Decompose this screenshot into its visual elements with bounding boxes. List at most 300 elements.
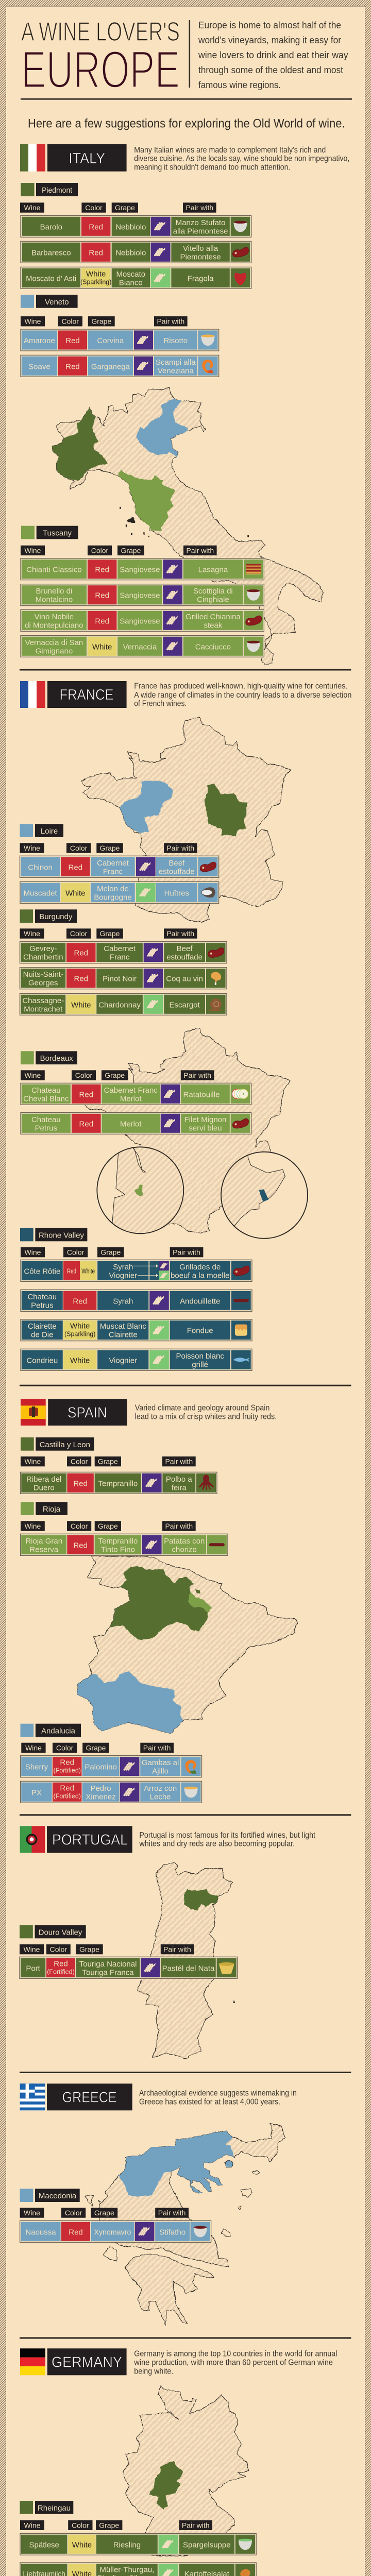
column headers: Macedonia: Grape [94,2209,114,2217]
row: Clairette de Die: White [70,1322,90,1331]
row: Brunello di Montalcino: Montalcino [36,596,73,604]
row: Barbaresco: Red [89,248,103,257]
row: Vino Nobile di Montepulciano: Grilled Chianina [185,613,241,621]
column headers: Rioja [21,1521,196,1531]
column headers: Andalucia [21,1743,174,1753]
legend: Piedmont [21,183,78,196]
row: Nuits-Saint-Georges: Nuits-Saint- [23,970,63,979]
row: Vernaccia di San Gimignano: Gimignano [36,647,73,655]
row: Moscato d' Asti: Bianco [119,278,143,287]
row: Chateau Petrus: Red [79,1120,93,1128]
column headers: Loire: Pair with [166,844,194,852]
column headers: Veneto: Pair with [157,317,184,326]
row: Barbaresco [21,241,251,263]
row: Chateau Petrus [21,1112,251,1134]
row: Port [20,1957,237,1978]
legend: Piedmont: Piedmont [42,186,73,195]
column headers: Burgundy: Wine [24,929,40,938]
row: Chassagne-Montrachet: Montrachet [24,1005,63,1013]
heading: Germany: GERMANY [52,2354,122,2370]
panel: Greece [20,2083,297,2325]
row: Nuits-Saint-Georges: Georges [28,979,58,988]
icon: shrimp [202,360,213,373]
row: Cote Rotie: Syrah [113,1263,133,1272]
row: Chateau Cheval Blanc: Ratatouille [183,1090,220,1099]
row: Vernaccia di San Gimignano: Cacciucco [195,642,231,651]
row: Ribera del Duero [21,1472,217,1494]
row: Soave: Red [65,362,80,371]
row: Amarone: Corvina [97,336,124,345]
row: Chateau Petrus: Filet Mignon [184,1115,226,1124]
icon: steak [232,1118,249,1128]
row: Spatlese: White [72,2540,92,2549]
row: Spatlese: Riesling [113,2540,141,2549]
column headers: Bordeaux: Grape [105,1071,125,1079]
row: Amarone: Red [65,336,80,345]
row: Vernaccia di San Gimignano: Vernaccia di San [25,638,83,647]
column headers: Burgundy: Pair with [166,929,194,938]
column headers: Douro Valley: Pair with [163,1945,191,1954]
heading: Portugal: PORTUGAL [52,1832,128,1849]
row: Chinon: Chinon [28,863,53,872]
icon: bowl [247,589,260,601]
row: Vino Nobile di Montepulciano: di Montepulciano [25,621,83,630]
column headers: Rheingau [20,2520,212,2530]
row: Liebfraumilch: Müller-Thurgau, [99,2566,154,2574]
row: PX [21,1781,202,1803]
column headers: Rheingau: Wine [24,2521,41,2529]
row: Soave: Soave [28,362,50,371]
row: Chinon [20,856,219,877]
row: Sherry: Ajillo [152,1767,168,1776]
intro text: wine lovers to drink and eat their way [198,49,348,60]
row: Cote Rotie: Red [67,1267,76,1275]
row: Muscadet [20,882,219,903]
column headers: Rhone Valley: Pair with [173,1248,200,1257]
row: Gevrey-Chambertin: Franc [110,953,130,962]
map: France, Loire and Burgundy [81,717,291,922]
panel: Italy [20,144,349,665]
row: Naoussa: Xynomavro [94,2228,131,2236]
row: Clairette de Die [21,1319,252,1341]
row: Vino Nobile di Montepulciano: steak [204,621,223,630]
row: Ribera del Duero: Ribera del [26,1475,61,1484]
row: Naoussa [20,2221,211,2242]
heading: France [47,681,127,708]
row: Ribera del Duero: Duero [33,1483,55,1492]
row: PX: Pedro [91,1784,111,1793]
row: Clairette de Die: Clairette [28,1322,57,1331]
row: Clairette de Die: (Sparkling) [64,1331,95,1338]
legend: Burgundy [20,909,77,923]
title: A WINE LOVER'S [21,17,180,47]
row: Chinon: Franc [103,867,123,876]
row: Condrieu: Poisson blanc [176,1352,224,1361]
column headers: Rhone Valley: Color [67,1248,85,1257]
row: Chateau Cheval Blanc: Red [79,1090,93,1099]
column headers: Tuscany: Pair with [186,546,214,554]
column headers: Piedmont: Grape [115,204,135,212]
row: Barbaresco: Barbaresco [31,248,71,257]
legend: Rioja [21,1502,68,1515]
column headers: Tuscany: Color [91,546,109,554]
row: Chateau Petrus: Petrus [35,1124,57,1132]
divider beside title [189,20,190,88]
row: Barolo: Nebbiolo [115,223,146,231]
column headers: Rheingau: Grape [99,2521,119,2529]
row: Moscato d' Asti: Fragola [188,274,214,283]
row: Chassagne-Montrachet: White [71,1001,91,1009]
row: Vino Nobile di Montepulciano [21,609,264,631]
column headers: Burgundy [20,928,197,939]
text: Greece intro: Greece has existed for at least 4,000 years. [139,2097,280,2106]
row: Chateau Petrus (Rhone): Petrus [31,1301,53,1310]
title [21,17,180,99]
row: Clairette de Die: Clairette [109,1331,138,1340]
row: Chinon: Red [69,863,82,872]
column headers: Andalucia: Pair with [143,1743,171,1752]
icon: bowl of soup [239,2539,252,2550]
heading: Greece: GREECE [62,2090,117,2106]
row: Rioja Gran Reserva: Tempranillo [98,1537,138,1546]
column headers: Loire: Wine [24,844,40,852]
row: PX: Arroz con [144,1784,177,1793]
row: Chinon: Cabernet [97,859,129,868]
row: Gevrey-Chambertin: Chambertin [23,953,63,962]
column headers: Bordeaux: Color [75,1071,93,1079]
row: Vernaccia di San Gimignano: White [92,642,112,651]
flag: Italy [20,144,45,172]
icon: bowl [234,221,247,232]
row: Barbaresco: Vitello alla [183,244,218,253]
subheading: Here are a few suggestions for exploring the Old World of wine. [28,117,345,131]
row: Moscato d' Asti: Moscato [116,270,145,279]
icon: steak [246,616,262,625]
icon: custard tart [219,1962,234,1974]
heading: Greece [47,2083,132,2110]
column headers: Castilla y Leon: Grape [98,1458,118,1466]
legend: Burgundy: Burgundy [39,912,73,921]
row: Amarone [21,329,219,351]
row: Ribera del Duero: Polbo a [166,1475,192,1484]
column headers: Bordeaux [21,1070,214,1080]
column headers: Burgundy: Grape [100,929,120,938]
icon: chicken leg [211,972,221,985]
row: Clairette de Die: Muscat Blanc [100,1322,146,1331]
row: Chinon: Beef [168,859,185,868]
row: Gevrey-Chambertin: Red [74,949,88,958]
column headers: Tuscany: Wine [25,546,41,554]
column headers: Rheingau: Pair with [182,2521,210,2529]
legend: Andalucia: Andalucia [41,1727,76,1735]
row: Condrieu: Viognier [109,1356,137,1365]
row: Cote Rotie: Grillades de [179,1263,221,1272]
row: Clairette de Die: de Die [31,1331,53,1340]
icon: strawberry [234,271,246,285]
row: Brunello di Montalcino: Red [95,591,109,600]
column headers: Andalucia: Color [56,1743,74,1752]
row: Condrieu: grillé [192,1360,208,1369]
flag: Greece [20,2083,45,2110]
row: Sherry: Red [60,1758,74,1767]
row: Nuits-Saint-Georges: Red [74,975,88,984]
row: Rioja Gran Reserva: Patatas con [164,1537,205,1546]
icon: sausage [209,1543,225,1546]
column headers: Andalucia: Grape [86,1743,106,1752]
row: Spatlese: Spätlese [29,2540,59,2549]
column headers: Andalucia: Wine [25,1743,42,1752]
row: Sherry: (Fortified) [53,1767,81,1774]
row: Brunello di Montalcino: Brunello di [36,587,72,596]
row: Barolo [21,215,251,237]
column headers: Castilla y Leon: Color [71,1458,88,1466]
row: Vino Nobile di Montepulciano: Red [95,617,109,625]
icon: snail [209,998,222,1011]
inset: Bordeaux circle [112,1147,183,1233]
intro text [198,20,348,90]
row: Rioja Gran Reserva: Rioja Gran [25,1537,62,1546]
column headers: Douro Valley: Wine [24,1945,40,1954]
row: Sherry [21,1756,202,1777]
row: Spatlese: Spargelsuppe [183,2540,231,2549]
row: Gevrey-Chambertin [20,942,227,963]
row: Chateau Petrus (Rhone): Andouillette [180,1297,220,1306]
legend: Loire: Loire [41,827,58,836]
row: Port: Pastél del Nata [162,1964,215,1973]
row: Moscato d' Asti: White [86,269,106,278]
row: Chateau Petrus (Rhone): Chateau [27,1293,57,1301]
row: Rioja Gran Reserva [21,1534,228,1555]
text: Italy intro: Many Italian wines are made to complement Italy's rich and [134,146,326,155]
row: Naoussa: Stifatho [159,2228,185,2236]
row: Gevrey-Chambertin: Gevrey- [29,944,57,953]
text: Portugal intro: whites and dry reds are also becoming popular. [139,1840,295,1849]
row: Barolo: Manzo Stufato [176,218,225,227]
row: Brunello di Montalcino [21,584,264,606]
row: Ribera del Duero: Tempranillo [98,1479,138,1488]
legend: Loire [20,824,63,837]
text: Spain intro: lead to a mix of crisp whites and fruity reds. [135,1412,277,1421]
column headers: Veneto: Color [61,317,79,326]
legend: Rheingau: Rheingau [38,2504,71,2513]
row: Chassagne-Montrachet: Chassagne- [22,996,64,1005]
row: Cote Rotie: White [81,1267,95,1275]
column headers: Piedmont: Color [85,204,103,212]
row: Barbaresco: Nebbiolo [115,248,146,257]
column headers: Macedonia: Color [65,2209,82,2217]
row: Chianti Classico: Lasagna [198,566,228,574]
column headers: Macedonia: Pair with [158,2209,185,2217]
row: Chianti Classico [21,558,264,580]
icon: shrimp [185,1760,197,1774]
row: Chateau Cheval Blanc: Chateau [31,1086,61,1095]
heading: Spain: SPAIN [68,1405,107,1421]
text: Italy intro [134,146,349,172]
legend: Rheingau [20,2501,73,2514]
text: Italy intro: meaning it shouldn't demand too much attention. [134,163,290,172]
column headers: Loire: Grape [100,844,120,852]
map: Italy [52,387,323,665]
column headers: Rhone Valley: Grape [100,1248,121,1257]
panel: France [20,681,351,1370]
map: Spain [77,1556,298,1733]
column headers: Rheingau: Color [72,2521,89,2529]
row: Moscato d' Asti: (Sparkling) [80,278,111,285]
row: Condrieu [21,1349,252,1370]
column headers: Douro Valley [20,1944,194,1954]
icon: oyster [200,887,215,897]
column headers: Rioja: Wine [24,1522,41,1530]
row: Chassagne-Montrachet: Escargot [169,1001,200,1009]
row: Port: Red [54,1959,68,1968]
icon: fondue pot [235,1325,247,1336]
panel: Spain [21,1399,298,1803]
text: Germany intro: being white. [134,2367,173,2376]
text: Greece intro [139,2089,297,2106]
column headers: Douro Valley: Color [50,1945,67,1954]
column headers: Rhone Valley: Wine [25,1248,41,1257]
column headers: Loire [20,843,197,853]
heading: France: FRANCE [60,687,113,703]
row: Chianti Classico: Sangiovese [120,566,160,574]
legend: Andalucia [21,1724,81,1737]
row: Ribera del Duero: Red [73,1479,88,1488]
column headers: Rioja: Grape [98,1522,118,1530]
row: Chianti Classico: Red [95,566,109,574]
legend: Veneto [21,295,78,308]
row: Naoussa: Red [69,2228,83,2236]
column headers: Piedmont [20,202,216,213]
legend: Rhone Valley [20,1228,87,1241]
legend: Castilla y Leon [21,1437,94,1451]
row: Nuits-Saint-Georges [20,968,227,989]
flag: Germany [20,2348,45,2375]
flag: Spain [21,1399,46,1426]
column headers: Rioja: Color [71,1522,88,1530]
column headers: Bordeaux: Pair with [183,1071,211,1079]
row: Cote Rotie [21,1260,252,1281]
row: Chateau Cheval Blanc: Merlot [120,1094,142,1103]
icon: ratatouille [232,1089,248,1098]
row: PX: Red [60,1784,74,1792]
legend: Tuscany: Tuscany [43,529,72,538]
row: Sherry: Gambas al [142,1758,179,1767]
title: EUROPE [21,40,180,99]
legend: Rioja: Rioja [43,1505,61,1514]
map: Germany [123,2385,248,2556]
row: Gevrey-Chambertin: Beef [177,944,193,953]
row: Chateau Petrus: Chateau [31,1115,61,1124]
row: Nuits-Saint-Georges: Coq au vin [166,975,203,984]
legend: Douro Valley [20,1925,86,1938]
row: Soave [21,355,219,377]
icon: coat of arms [29,1406,38,1417]
column headers: Piedmont: Wine [24,204,41,212]
flag: France [20,681,45,708]
row: Muscadet: Huîtres [164,889,189,897]
row: Liebfraumilch [20,2563,256,2576]
map: Portugal [137,1862,234,2059]
icon: bowl of risotto [201,334,214,346]
row: Chateau Petrus (Rhone): Syrah [113,1297,133,1306]
text: Germany intro: wine production, with more than 60 percent of German wine [133,2358,333,2367]
icon: bowl [184,1787,198,1798]
text: France intro: France has produced well-known, high-quality wine for centuries. [134,682,347,691]
row: Chateau Petrus (Rhone): Red [73,1297,87,1306]
row: Muscadet: Muscadet [24,889,58,897]
column headers: Bordeaux: Wine [24,1071,41,1079]
row: Port: Port [26,1964,41,1973]
text: Spain intro [135,1403,277,1421]
row: PX: (Fortified) [53,1792,81,1800]
row: Rioja Gran Reserva: Tinto Fino [101,1545,135,1554]
column headers: Piedmont: Pair with [185,204,213,212]
row: Cote Rotie: boeuf a la moelle [171,1271,229,1280]
icon: octopus [198,1475,214,1490]
column headers: Veneto: Wine [25,317,41,326]
text: France intro: A wide range of climates in the country leads to a diverse selection [134,691,351,700]
intro text: famous wine regions. [198,79,281,90]
row: Moscato d' Asti [21,267,251,289]
row: Moscato d' Asti: Moscato d' Asti [26,274,76,283]
row: PX: Ximenez [86,1792,116,1801]
row: Naoussa: Naoussa [25,2228,56,2236]
legend: Castilla y Leon: Castilla y Leon [40,1440,90,1449]
row: Soave: Scampi alla [156,358,196,367]
column headers: Burgundy: Color [70,929,88,938]
row: Muscadet: Bourgogne [94,893,132,902]
row: Chateau Petrus: servi bleu [189,1124,222,1132]
legend: Veneto: Veneto [45,298,69,307]
row: Soave: Garganega [91,362,130,371]
row: Port: Touriga Nacional [79,1960,137,1969]
row: Soave: Veneziana [158,366,194,375]
heading: Spain [48,1399,127,1426]
panel: Portugal [20,1826,315,2059]
row: Chateau Cheval Blanc [21,1083,251,1105]
inset: Rhone circle [222,1153,285,1226]
map: Greece [85,2124,285,2325]
row: Clairette de Die: Fondue [187,1327,213,1335]
text: Germany intro: Germany is among the top 10 countries in the world for annual [134,2349,337,2358]
arrows: grape pointers [133,1264,158,1277]
text: Portugal intro [139,1831,315,1849]
text: Greece intro: Archaeological evidence suggests winemaking in [139,2089,297,2098]
row: Vernaccia di San Gimignano: Vernaccia [123,642,157,651]
row: Rioja Gran Reserva: chorizo [172,1545,197,1554]
icon: bowl [194,2226,207,2237]
map: France, Bordeaux and Rhone zoom [81,1028,291,1233]
icon: potato [239,2568,251,2576]
row: Barolo: Red [89,223,103,231]
row: PX: Leche [150,1792,171,1801]
row: Vernaccia di San Gimignano [21,635,264,657]
row: Cote Rotie: Viognier [109,1271,137,1280]
legend: Macedonia [20,2189,80,2202]
row: Nuits-Saint-Georges: Pinot Noir [103,975,137,984]
row: Brunello di Montalcino: Cinghiale [197,596,229,604]
legend: Tuscany [21,526,78,539]
column headers: Castilla y Leon: Wine [24,1458,41,1466]
row: Muscadet: Melon de [97,885,129,893]
text: Portugal intro: Portugal is most famous for its fortified wines, but light [139,1831,315,1840]
row: Sherry: Palomino [85,1763,117,1772]
column headers: Castilla y Leon [21,1456,196,1466]
row: Condrieu: Condrieu [26,1356,58,1365]
row: Gevrey-Chambertin: Cabernet [104,944,136,953]
row: Gevrey-Chambertin: estouffade [166,953,203,962]
text: Spain intro: Varied climate and geology around Spain [135,1403,269,1412]
